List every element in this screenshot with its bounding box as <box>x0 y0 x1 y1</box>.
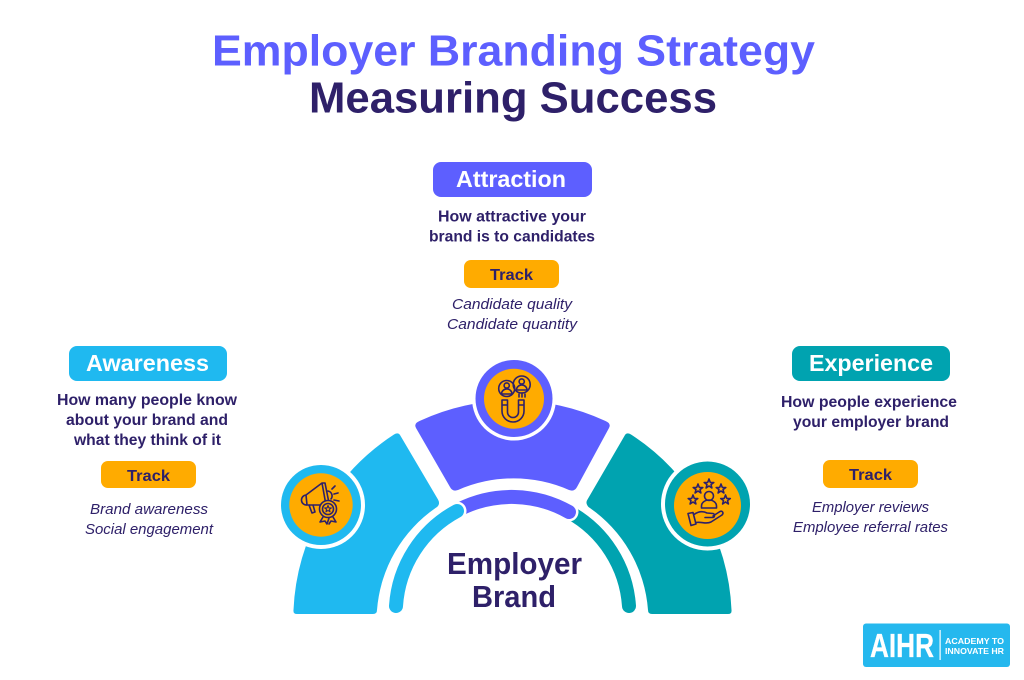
logo: AIHR: AIHR <box>870 627 934 664</box>
attraction metrics: Candidate quantity <box>447 316 579 333</box>
logo: AIHR <box>863 624 1010 667</box>
panel: awareness <box>57 346 238 538</box>
arch segment: experience <box>586 433 732 614</box>
attraction description <box>429 208 595 246</box>
attraction track badge <box>464 260 559 288</box>
title: Measuring Success <box>309 74 717 122</box>
awareness track badge: Track <box>127 468 170 485</box>
experience description <box>781 394 957 431</box>
attraction track badge: Track <box>490 267 533 284</box>
experience metrics: Employer reviews <box>812 499 929 516</box>
awareness heading <box>69 346 227 381</box>
arch segment: attraction <box>415 400 610 491</box>
attraction description: How attractive your <box>438 208 586 226</box>
center label: Employer <box>447 546 582 581</box>
arch segment: awareness <box>293 433 439 614</box>
attraction description: brand is to candidates <box>429 228 595 246</box>
inner ring: experience <box>569 512 629 606</box>
experience heading <box>792 346 950 381</box>
icon: megaphone with medal <box>277 461 365 549</box>
experience description: How people experience <box>781 394 957 411</box>
center label <box>447 546 582 614</box>
icon: hand with person and stars <box>661 458 754 550</box>
attraction metrics: Candidate quality <box>452 296 574 313</box>
awareness heading: Awareness <box>86 350 209 376</box>
awareness description: How many people know <box>57 392 238 409</box>
icon: magnet attracting people <box>472 356 556 440</box>
awareness metrics <box>85 501 214 538</box>
inner ring: attraction <box>460 497 569 512</box>
awareness description <box>57 392 238 449</box>
panel: experience <box>781 346 957 536</box>
experience heading: Experience <box>809 350 933 376</box>
logo: AIHR: INNOVATE HR <box>945 646 1004 656</box>
inner ring: awareness <box>396 511 457 606</box>
panel: attraction <box>429 162 595 333</box>
experience description: your employer brand <box>793 414 949 431</box>
awareness metrics: Brand awareness <box>90 501 209 518</box>
attraction heading <box>433 162 592 197</box>
title: Employer Branding Strategy <box>212 26 816 76</box>
awareness metrics: Social engagement <box>85 521 214 538</box>
title <box>212 26 816 122</box>
awareness description: about your brand and <box>66 412 228 429</box>
logo: AIHR: ACADEMY TO <box>945 636 1004 646</box>
attraction metrics <box>447 296 579 333</box>
awareness description: what they think of it <box>73 432 222 449</box>
center label: Brand <box>472 579 556 614</box>
attraction heading: Attraction <box>456 166 566 192</box>
experience metrics <box>793 499 948 536</box>
arch diagram <box>277 356 754 614</box>
experience metrics: Employee referral rates <box>793 519 948 536</box>
awareness track badge <box>101 461 196 488</box>
experience track badge: Track <box>849 467 892 484</box>
experience track badge <box>823 460 918 488</box>
